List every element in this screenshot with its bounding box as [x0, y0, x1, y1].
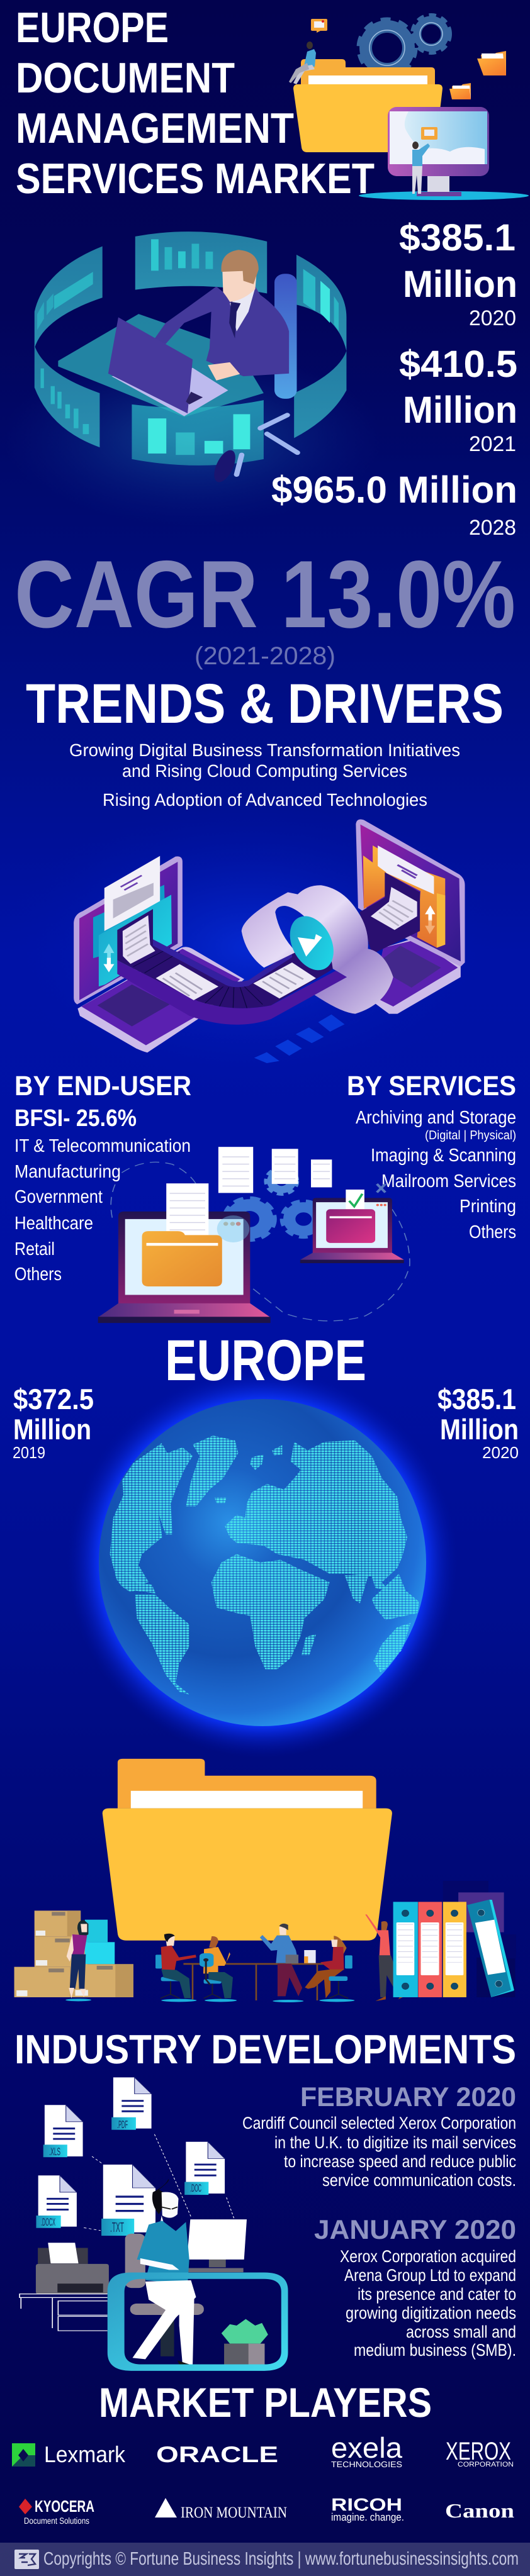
text block: january 2020: JANUARY 2020	[314, 2215, 516, 2245]
seated man in orange	[200, 1936, 233, 1999]
connector dashes	[84, 2170, 234, 2231]
logos: market players	[12, 2431, 514, 2526]
panel: by end-user	[14, 1071, 191, 1285]
conveyor documents	[155, 962, 316, 1000]
right laptop screen	[356, 819, 465, 967]
title: MANAGEMENT	[16, 104, 294, 152]
globe	[67, 1368, 458, 1758]
desk frame	[108, 2273, 288, 2371]
logo: Iron Mountain	[155, 2498, 287, 2521]
icon: large gear	[360, 21, 414, 75]
stat: 2021 market size: 2021	[469, 432, 516, 456]
file: DOCX	[36, 2175, 77, 2228]
boxes	[14, 1910, 133, 1997]
logo: Iron Mountain: IRON MOUNTAIN	[181, 2504, 287, 2521]
small laptop	[300, 1198, 404, 1263]
chair	[125, 2234, 204, 2356]
small laptop document	[346, 1190, 364, 1212]
stat: 2019 europe: Million	[13, 1413, 91, 1446]
stat: 2020 market size	[399, 216, 517, 330]
globe sphere	[99, 1399, 426, 1726]
segment list: Retail	[14, 1239, 55, 1259]
logo: Ricoh	[331, 2495, 404, 2523]
logo: Kyocera: Document Solutions	[24, 2516, 89, 2526]
stat: 2020 market size: Million	[403, 263, 517, 305]
logo: Oracle: ORACLE	[156, 2441, 278, 2467]
segment list	[356, 1108, 516, 1242]
ground discs	[65, 1999, 354, 2002]
text block: drivers: and Rising Cloud Computing Services	[122, 761, 407, 781]
side desk	[20, 2294, 108, 2331]
left opening paper	[123, 915, 155, 964]
icon: small gear	[413, 16, 449, 52]
woman with boxes	[67, 1920, 88, 1999]
chair	[274, 274, 296, 399]
documents	[218, 1147, 332, 1193]
floor glow	[3, 351, 382, 525]
seated woman in red	[304, 1936, 352, 1999]
laptop screen	[108, 317, 193, 413]
hand	[208, 362, 240, 381]
x mark	[377, 1184, 385, 1193]
background glow	[0, 801, 504, 1095]
icon: ground ellipse	[359, 191, 529, 200]
arrows on cyan folder	[103, 944, 114, 973]
illustration: businessman with holographic dashboard	[3, 231, 382, 525]
logo: Lexmark: Lexmark	[44, 2441, 126, 2467]
translucent gear overlay	[217, 1215, 249, 1242]
file: DOC	[184, 2142, 225, 2195]
check disc	[283, 913, 341, 974]
blue back folder	[93, 885, 166, 958]
text block: drivers: Growing Digital Business Transformation Initiatives	[69, 740, 460, 760]
icon: monitor	[388, 107, 489, 196]
document	[104, 856, 160, 931]
illustration: document workflow between laptops	[0, 801, 504, 1095]
icon: brand mark	[14, 2550, 39, 2569]
stat: 2019 europe	[13, 1383, 94, 1462]
segment list: IT & Telecommunication	[14, 1136, 191, 1156]
chair legs	[237, 415, 298, 474]
segment list: Others	[469, 1222, 516, 1242]
icon: person at monitor	[412, 142, 430, 194]
illustration: laptops, gears and documents	[98, 1147, 410, 1323]
logo: Kyocera: KYOCERA	[35, 2497, 94, 2516]
tie	[229, 302, 240, 338]
conveyor surface	[117, 909, 369, 1008]
giant folder	[103, 1759, 392, 1941]
heading: market players: MARKET PLAYERS	[99, 2379, 432, 2426]
dotted continents	[110, 1436, 419, 1695]
logo: Exela: TECHNOLOGIES	[331, 2460, 402, 2469]
panel: by services	[347, 1071, 516, 1242]
stat: 2020 europe	[437, 1383, 519, 1462]
office scene	[14, 1881, 516, 2002]
logo: Exela: exela	[331, 2431, 402, 2464]
illustration: giant folder with office team	[14, 1759, 516, 2002]
bars on back panels	[37, 239, 339, 434]
conveyor slats	[133, 948, 262, 1010]
segment list: Manufacturing	[14, 1162, 121, 1182]
large laptop	[98, 1212, 271, 1323]
logo: Ricoh: RICOH	[331, 2495, 402, 2514]
ribbon	[242, 885, 393, 1014]
illustration: file icons and woman at desk: .DOC	[190, 2182, 201, 2194]
file: TXT	[101, 2165, 155, 2236]
laptop keys	[186, 392, 203, 404]
monitor	[166, 2219, 247, 2272]
illustration: file icons and woman at desk	[20, 2077, 288, 2371]
heading: europe: EUROPE	[165, 1329, 366, 1393]
logo: Lexmark	[12, 2441, 126, 2467]
table	[183, 1963, 328, 2000]
text block: january 2020: across small and	[406, 2322, 516, 2341]
icon: large yellow folder	[293, 59, 443, 152]
stat: 2020 market size: 2020	[469, 306, 516, 330]
binders	[393, 1899, 514, 1997]
right opening with paper	[359, 873, 420, 954]
suit	[154, 286, 289, 376]
stat: 2020 europe: $385.1	[437, 1383, 516, 1415]
right laptop base	[372, 937, 461, 1014]
stat: 2020 market size: $385.1	[399, 216, 516, 259]
conveyor front strip	[117, 961, 347, 1025]
stat: 2028 market size: 2028	[469, 516, 516, 540]
magenta folder	[326, 1209, 375, 1243]
title: EUROPE	[16, 4, 169, 52]
face	[222, 270, 257, 302]
cyan front folder	[99, 895, 172, 986]
text block: january 2020	[314, 2215, 516, 2360]
standing man in blue	[260, 1924, 302, 1996]
pointing man	[365, 1914, 405, 2001]
leading segment: BFSI- 25.6%	[14, 1105, 137, 1132]
globe glow	[67, 1368, 458, 1758]
printer	[36, 2243, 109, 2294]
segment list: Imaging & Scanning	[371, 1146, 516, 1166]
laptop base	[111, 368, 228, 416]
background shapes	[443, 1881, 516, 1997]
stat: 2028 market size	[271, 469, 517, 540]
illustration: folder, gears and monitor	[289, 16, 529, 200]
heading: BY END-USER	[14, 1071, 191, 1101]
title: DOCUMENT	[16, 54, 235, 102]
plant	[222, 2319, 268, 2365]
hair	[222, 250, 259, 284]
connector dashes	[92, 2134, 171, 2170]
left laptop screen	[74, 856, 183, 1005]
chair foot	[210, 448, 240, 484]
seated man in red	[155, 1934, 196, 1999]
stat: 2019 europe: 2019	[13, 1443, 45, 1462]
shirt	[230, 288, 255, 332]
segment list: Printing	[460, 1196, 516, 1217]
stat: 2021 market size: Million	[403, 389, 517, 431]
title: SERVICES MARKET	[16, 155, 375, 203]
heading: BY SERVICES	[347, 1071, 516, 1101]
small blue icons	[254, 1015, 344, 1063]
desk scene	[20, 2142, 288, 2371]
stat: 2020 europe: Million	[440, 1413, 519, 1446]
text block: february 2020	[242, 2082, 516, 2190]
conveyor back rail	[153, 939, 292, 987]
arrows on orange folder	[425, 905, 436, 934]
orange folders	[363, 845, 445, 948]
desk	[58, 314, 264, 417]
logo: Kyocera	[19, 2497, 94, 2526]
logo: Xerox: CORPORATION	[458, 2461, 514, 2468]
icon: speech bubble	[311, 19, 327, 33]
logo: Ricoh: imagine. change.	[331, 2511, 404, 2523]
stat: 2021 market size: $410.5	[399, 343, 517, 385]
dashed orbit lines	[111, 1162, 410, 1321]
icon: person sitting on folder	[289, 42, 316, 84]
segment list: Archiving and Storage	[356, 1108, 516, 1128]
segment list: (Digital | Physical)	[425, 1129, 516, 1142]
segment list: Government	[14, 1187, 103, 1207]
file icons upper	[43, 2077, 171, 2170]
document over laptop	[166, 1183, 208, 1235]
segment list	[14, 1136, 191, 1285]
gears	[225, 1168, 325, 1240]
file: PDF	[111, 2077, 152, 2130]
stat: 2028 market size: $965.0 Million	[271, 469, 517, 511]
file labels: .TXT	[110, 2219, 124, 2235]
icon: small folders	[449, 51, 506, 99]
footer bar	[0, 2543, 530, 2576]
file labels: .XLS	[49, 2146, 60, 2158]
woman	[133, 2179, 196, 2365]
stat: 2019 europe: $372.5	[13, 1383, 94, 1415]
left laptop base	[77, 947, 244, 1052]
panel: front bar panel	[132, 400, 264, 466]
file: XLS	[43, 2105, 83, 2157]
stat: 2021 market size	[399, 343, 517, 456]
file labels: .DOCX	[41, 2216, 55, 2228]
file labels: .PDF	[117, 2119, 128, 2131]
text block: drivers	[69, 740, 460, 810]
panel: holographic back panels	[35, 231, 346, 447]
orange folder	[142, 1231, 222, 1286]
CAGR callout: (2021-2028)	[195, 642, 335, 670]
text block: drivers: Rising Adoption of Advanced Technologies	[103, 790, 427, 810]
text block: february 2020: FEBRUARY 2020	[300, 2082, 516, 2112]
segment list: Healthcare	[14, 1213, 93, 1234]
title	[16, 4, 375, 203]
file labels	[41, 2119, 201, 2235]
bright bars	[148, 414, 250, 455]
logo: Canon: Canon	[445, 2499, 514, 2522]
segment list: Mailroom Services	[381, 1171, 516, 1191]
stat: 2020 europe: 2020	[482, 1443, 519, 1462]
segment list: Others	[14, 1264, 62, 1285]
